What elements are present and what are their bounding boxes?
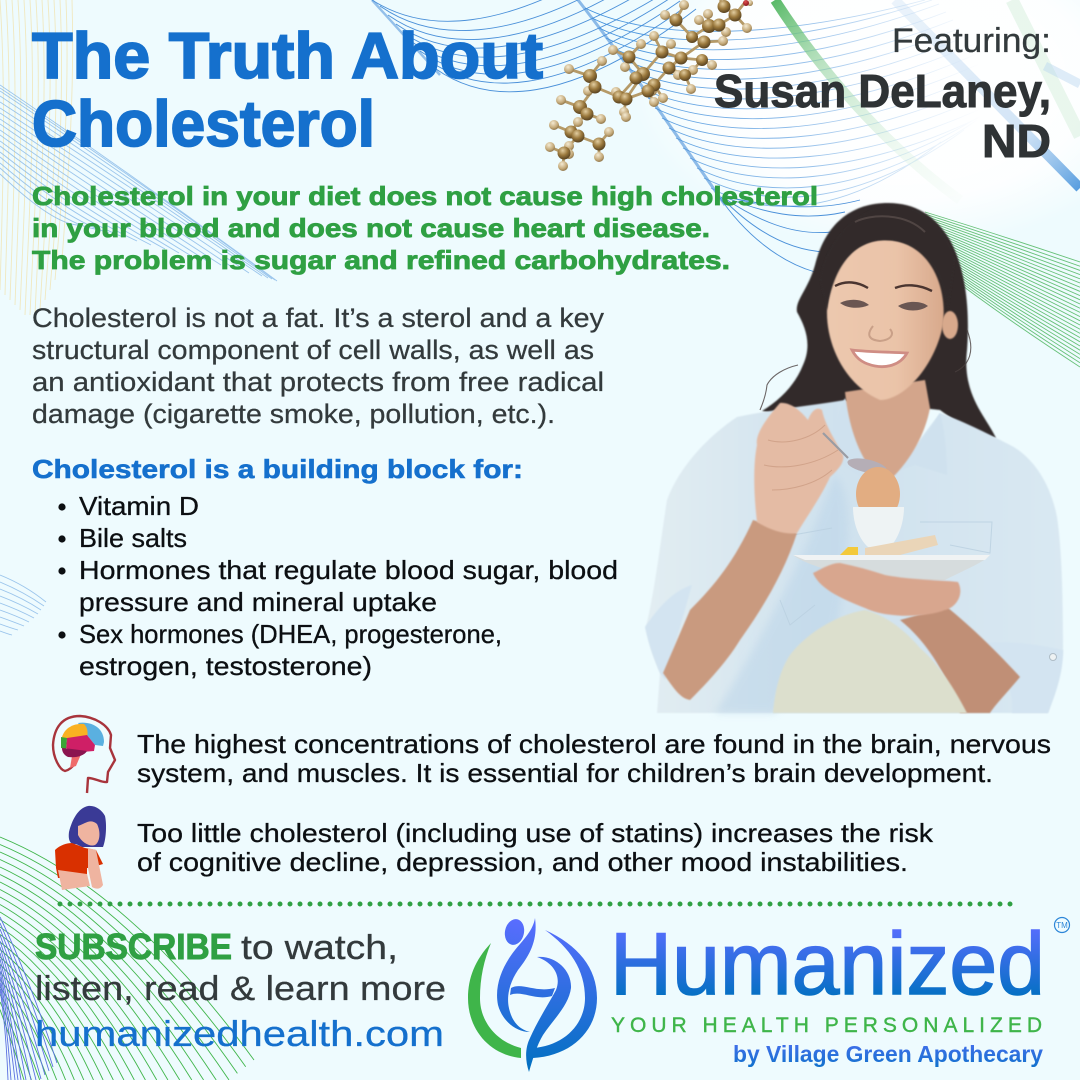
statins text: Too little cholesterol (including use of statins) increases the risk [137,818,934,848]
trademark [1054,918,1070,932]
icon: brain in head [53,716,115,793]
intro paragraph: damage (cigarette smoke, pollution, etc.). [32,399,555,429]
cuff button [1050,654,1056,660]
photo: woman eating an egg [645,203,1063,713]
title [32,19,543,160]
featuring credit: ND [982,115,1051,167]
intro paragraph: Cholesterol is not a fat. It’s a sterol and a key [32,303,605,333]
right forearm [900,607,1020,713]
tagline: YOUR HEALTH PERSONALIZED [611,1014,1042,1037]
neck and chest [845,380,930,477]
egg cup [853,507,904,547]
dotted divider [60,902,1012,906]
building block bullet list: Bile salts [79,523,187,553]
building block bullet list: Hormones that regulate blood sugar, blood [79,555,618,585]
subheading: Cholesterol is a building block for: [32,454,523,484]
green key message: The problem is sugar and refined carbohydrates. [32,245,730,275]
featuring credit: Featuring: [892,22,1051,60]
eyebrows [835,282,932,291]
trademark: TM [1056,921,1068,930]
subscribe call to action [35,926,446,1054]
eyes [840,300,928,310]
rolled cuffs [645,585,1063,713]
featuring credit [714,22,1051,167]
plate [793,555,990,580]
raised hand [754,403,843,533]
statins fact [55,806,934,890]
molecule illustration [545,0,753,171]
logo mark [468,917,597,1072]
shirt pocket folds [780,522,992,625]
subscribe call to action: SUBSCRIBE [35,926,232,967]
white glow top right [630,0,1080,250]
hair top [820,205,955,310]
hand under plate [813,563,960,616]
Humanized logo [468,914,1070,1072]
green key message: Cholesterol in your diet does not cause high cholesterol [32,181,818,211]
back hair [762,203,996,438]
egg [856,467,900,521]
intro paragraph: structural component of cell walls, as well as [32,335,594,365]
title: Cholesterol [32,87,375,160]
shirt collar [833,398,947,482]
left forearm [663,520,797,700]
byline: by Village Green Apothecary [733,1041,1043,1067]
subscribe call to action: to watch, [241,929,398,967]
building block bullet list: estrogen, testosterone) [79,651,372,681]
brain fact: system, and muscles. It is essential for children’s brain development. [137,758,993,788]
statins fact: of cognitive decline, depression, and other mood instabilities. [137,847,908,877]
featuring credit: Susan DeLaney, [714,65,1051,117]
face [827,240,944,400]
finger creases [764,425,838,490]
toast and butter [865,535,938,555]
shirt shading [715,475,848,713]
logo wordmark: Humanized [610,914,1045,1013]
knee [773,610,967,713]
nose [869,326,892,341]
shirt [646,400,1063,713]
brain fact [53,716,1051,793]
ear [942,311,958,339]
brain text: The highest concentrations of cholesterol are found in the brain, nervous [137,729,1051,759]
title: The Truth About [32,19,543,92]
loose hair wisps [760,330,971,410]
intro paragraph [32,303,605,429]
building block bullet list: Sex hormones (DHEA, progesterone, [79,619,502,649]
hair highlight [855,216,925,232]
icon: woman thinking [55,806,106,890]
building block bullet list: pressure and mineral uptake [79,587,437,617]
subscribe call to action: listen, read & learn more [35,970,446,1008]
spoon [823,433,848,458]
building block bullet list [58,491,618,681]
building block bullet list: Vitamin D [79,491,199,521]
green key message [32,181,818,275]
intro paragraph: an antioxidant that protects from free radical [32,367,604,397]
green key message: in your blood and does not cause heart disease. [32,213,710,243]
smile [852,350,907,367]
subscribe call to action: humanizedhealth.com [35,1013,444,1054]
